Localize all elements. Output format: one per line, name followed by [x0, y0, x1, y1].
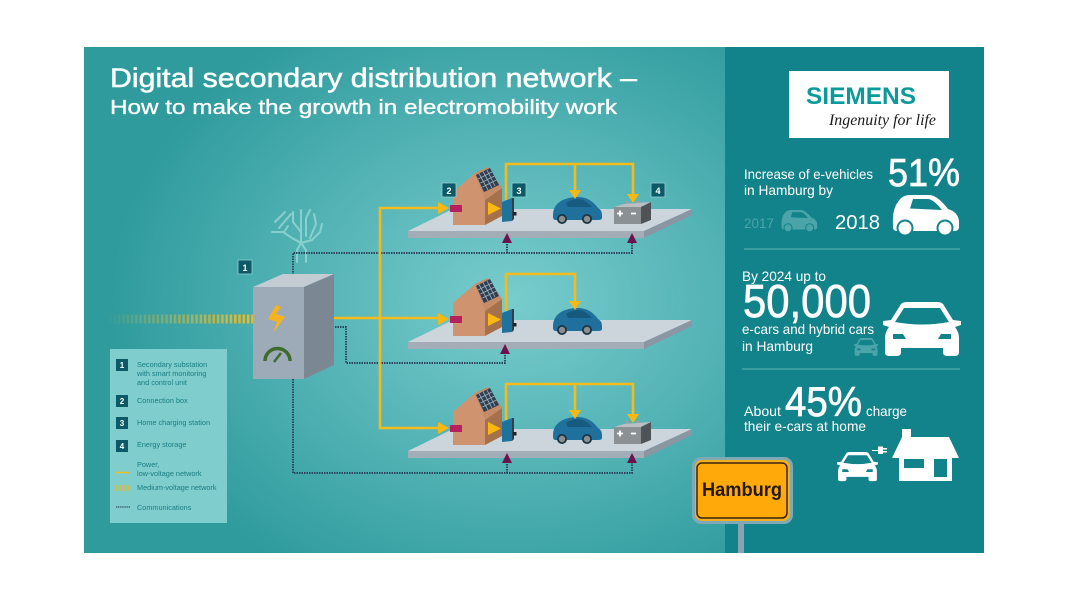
stat: 51 percent increase: 2018: [835, 212, 880, 234]
icon: lightning bolt: [268, 305, 285, 333]
number tag 1: [238, 260, 252, 274]
stat: 50,000 cars: [742, 268, 961, 356]
Siemens logo box: Ingenuity for life: [828, 112, 936, 129]
sign post: [738, 522, 744, 553]
communication arrow right: [627, 233, 637, 243]
legend panel: Connection box: [137, 396, 188, 405]
medium-voltage incoming line: [105, 314, 253, 324]
stat: 45 percent charge at home: 45%: [785, 378, 862, 425]
icon: small front car: [854, 338, 878, 356]
legend panel: Home charging station: [137, 418, 210, 427]
icon: plug: [872, 446, 887, 454]
communication arrow: [500, 344, 510, 354]
number tag 3: [512, 183, 526, 197]
main background panel: [84, 47, 726, 553]
icon: large front car: [883, 302, 961, 356]
legend panel: Medium-voltage network: [137, 483, 217, 492]
stat: 50,000 cars: in Hamburg: [742, 338, 813, 354]
car: [553, 308, 602, 335]
communication arrow right: [627, 453, 637, 463]
energy storage battery: [614, 201, 651, 224]
stat: 45 percent charge at home: About: [744, 403, 781, 419]
number tag 2: 2: [446, 186, 452, 196]
title: Digital secondary distribution network –: [110, 63, 637, 93]
connection box: [450, 425, 462, 432]
stat: 50,000 cars: e-cars and hybrid cars: [742, 321, 874, 337]
legend panel: Power,: [137, 460, 159, 469]
icon: small car 2017: [781, 210, 817, 232]
row 1: house with charging and storage: [408, 167, 692, 243]
power low-voltage network lines: [320, 164, 633, 428]
house with solar panel: [453, 387, 502, 445]
charging station: [502, 418, 516, 442]
legend panel: with smart monitoring: [136, 369, 206, 378]
number tag 4: [651, 183, 665, 197]
legend panel: Energy storage: [137, 440, 186, 449]
stat: 51 percent increase: Increase of e-vehicles: [744, 166, 873, 182]
stat: 51 percent increase: [744, 152, 960, 236]
legend panel: 4: [120, 442, 125, 451]
communication arrow left: [502, 233, 512, 243]
communication arrow left: [502, 453, 512, 463]
number tag 1: 1: [242, 263, 248, 273]
icon: large car 2018: [893, 195, 959, 236]
number tag 4: 4: [655, 186, 661, 196]
stat: 45 percent charge at home: their e-cars at home: [744, 418, 866, 434]
legend panel: 2: [120, 397, 125, 406]
right statistics panel: [725, 47, 984, 553]
arrowheads: [438, 410, 639, 435]
legend panel: Secondary substation: [137, 360, 207, 369]
connection box: [450, 316, 462, 323]
icon: gauge: [265, 348, 290, 362]
legend panel: low-voltage network: [137, 469, 202, 478]
car: [553, 417, 602, 444]
stat: 45 percent charge at home: charge: [866, 403, 907, 419]
stat: 51 percent increase: 2017: [744, 215, 774, 231]
stat: 45 percent charge at home: [744, 378, 959, 481]
Siemens logo box: SIEMENS: [806, 83, 916, 110]
number tag 2: [442, 183, 456, 197]
legend panel: and control unit: [137, 378, 187, 387]
charging station: [502, 309, 516, 333]
arrowheads: [438, 301, 581, 326]
charging station: [502, 198, 516, 222]
title: [110, 63, 637, 119]
stat: 50,000 cars: By 2024 up to: [742, 268, 826, 284]
legend panel: [110, 349, 227, 523]
row 2: house with charging: [408, 278, 692, 354]
house with solar panel: [453, 278, 502, 336]
legend panel: 1: [120, 361, 125, 370]
legend panel: 3: [120, 419, 125, 428]
energy storage battery: [614, 421, 651, 444]
Hamburg town sign: [692, 457, 793, 553]
legend panel: Communications: [137, 503, 192, 512]
icon: house: [892, 429, 959, 481]
secondary substation: [253, 274, 334, 379]
number tag 3: 3: [516, 186, 522, 196]
Siemens logo box: [789, 71, 949, 138]
row 3: house with charging and storage: [408, 387, 692, 463]
communications lines: [293, 243, 632, 473]
car: [553, 197, 602, 224]
icon: brain network: [272, 210, 322, 262]
Hamburg town sign: Hamburg: [702, 480, 782, 501]
arrowheads: [438, 190, 639, 215]
stat: 51 percent increase: 51%: [888, 152, 960, 195]
title: How to make the growth in electromobility work: [110, 96, 618, 119]
connection box: [450, 205, 462, 212]
icon: car charging: [837, 452, 878, 481]
house with solar panel: [453, 167, 502, 225]
stat: 50,000 cars: 50,000: [743, 275, 871, 327]
stat: 51 percent increase: in Hamburg by: [744, 182, 833, 198]
